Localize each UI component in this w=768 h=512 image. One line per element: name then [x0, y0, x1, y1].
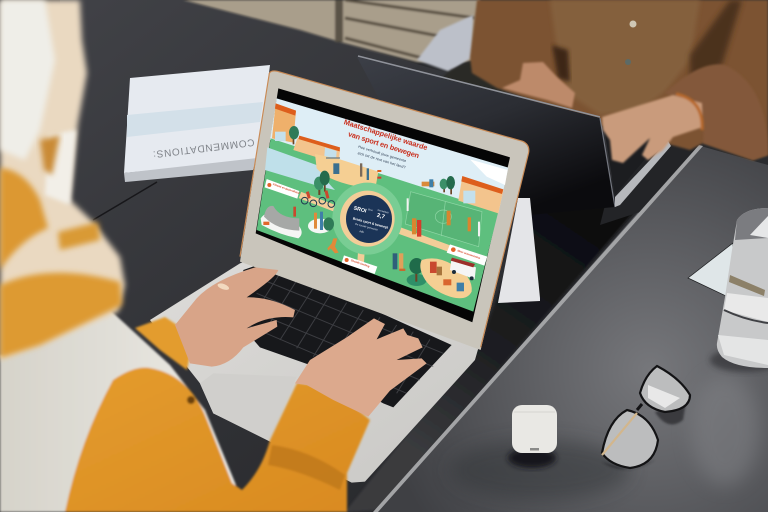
main laptop base and keyboard [150, 253, 478, 483]
skate ramp area [261, 206, 302, 238]
hands of person at back [502, 62, 703, 163]
low orange school building [293, 136, 340, 164]
dark laptop at back [357, 56, 671, 215]
bench person and trees [422, 176, 455, 194]
central circle with results: Bron [368, 208, 374, 212]
infographic title: van sport en bewegen [347, 129, 421, 160]
tree [289, 126, 299, 144]
ring [217, 282, 230, 291]
infographic title: Maatschappelijke waarde [343, 117, 429, 152]
label: right pill: Meer economische [457, 248, 481, 260]
left apartment building [272, 103, 296, 143]
right hand [295, 318, 427, 417]
laptop base [150, 253, 478, 483]
left hand [175, 267, 295, 367]
label: left pill [265, 179, 301, 199]
main laptop lid and screen [240, 71, 529, 350]
papers: recommendations report [124, 65, 270, 182]
hijab with orange and cream pattern [0, 0, 125, 360]
tan strip in glass [729, 275, 765, 296]
empty glass top [735, 208, 768, 240]
water glass [710, 208, 768, 372]
left hand sleeve [135, 317, 191, 370]
label: right pill [447, 244, 487, 266]
municipality caption: Breda sport & beweegt [352, 216, 389, 230]
picnic area [420, 258, 472, 298]
sports field [405, 192, 482, 247]
paper under laptop [498, 198, 540, 303]
eyeglasses [602, 366, 690, 470]
lake [265, 147, 335, 190]
central circle with results: Info [359, 229, 365, 234]
central circle with results: De sociale gemeente [355, 223, 379, 232]
shirt buttons [625, 20, 636, 65]
lower lens [602, 410, 658, 468]
hijab folds [0, 0, 55, 160]
playground figures [326, 157, 381, 180]
orange upper patch [0, 168, 48, 270]
label: bottom pill: Sociale binding [350, 258, 371, 268]
SROI value: SROI [353, 205, 367, 215]
orange inner patch [58, 222, 100, 250]
green ground [257, 138, 498, 312]
black screen bezel [256, 88, 510, 322]
people on white blob [308, 212, 334, 233]
sky [270, 98, 508, 213]
central circle with results [332, 183, 402, 255]
grey office chair [417, 15, 473, 72]
hijab cream top [0, 0, 125, 360]
infographic on screen [257, 98, 508, 312]
upper lens [640, 366, 690, 412]
white vest [0, 310, 236, 512]
blurred background with window blinds [183, 0, 480, 62]
water line [724, 310, 768, 323]
walkers with dog [393, 253, 405, 271]
sandy playground [315, 154, 378, 186]
label: bottom pill [342, 255, 377, 274]
orange torso and arm [65, 368, 370, 512]
report heading: COMMENDATIONS: [152, 136, 255, 159]
right sports hall [458, 176, 503, 213]
glass body [717, 208, 768, 368]
dark laptop keyboard [604, 128, 665, 195]
dark laptop base edge [615, 141, 671, 207]
earbuds case [508, 405, 557, 468]
orange lower drape [0, 273, 122, 358]
runner [327, 238, 339, 253]
white reflection [724, 293, 768, 322]
van with canoe [450, 258, 476, 280]
laptop lid [240, 71, 529, 350]
glasses shadows [602, 402, 686, 470]
tree cluster [407, 258, 427, 286]
label: left pill: Fitheid en gezondheid [272, 182, 301, 195]
cycling road and paths [300, 185, 453, 263]
infographic subtitle: Hoe verhoudt jouw gemeente [358, 145, 407, 163]
central circle with results: Gemiddeld [377, 210, 389, 215]
hands typing [175, 267, 427, 417]
infographic subtitle: zich tot de rest van het land? [357, 151, 406, 170]
person in front: white vest, orange blouse, hijab [0, 310, 370, 512]
cyclists [301, 191, 335, 207]
SROI number: 2,7 [376, 213, 385, 221]
paper under water glass [688, 243, 733, 300]
lens reflections [648, 385, 680, 408]
brown shirt of person at back [440, 0, 768, 160]
tree group by lake [314, 171, 330, 195]
dark laptop lid [357, 57, 615, 215]
keyboard [243, 262, 452, 407]
white collar strip [45, 130, 76, 205]
